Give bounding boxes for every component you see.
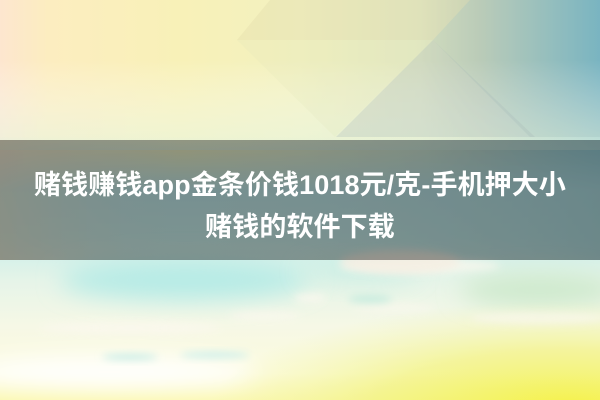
title text (34, 170, 566, 242)
geometric shapes (237, 0, 600, 137)
upper gradient (0, 0, 600, 260)
dark title band (0, 140, 600, 260)
lower sky (0, 137, 600, 400)
title text: 赌钱赚钱app金条价钱1018元/克-手机押大小 (34, 170, 566, 200)
title text: 赌钱的软件下载 (205, 212, 395, 242)
clouds (40, 259, 600, 334)
cloud behind band (340, 250, 460, 274)
